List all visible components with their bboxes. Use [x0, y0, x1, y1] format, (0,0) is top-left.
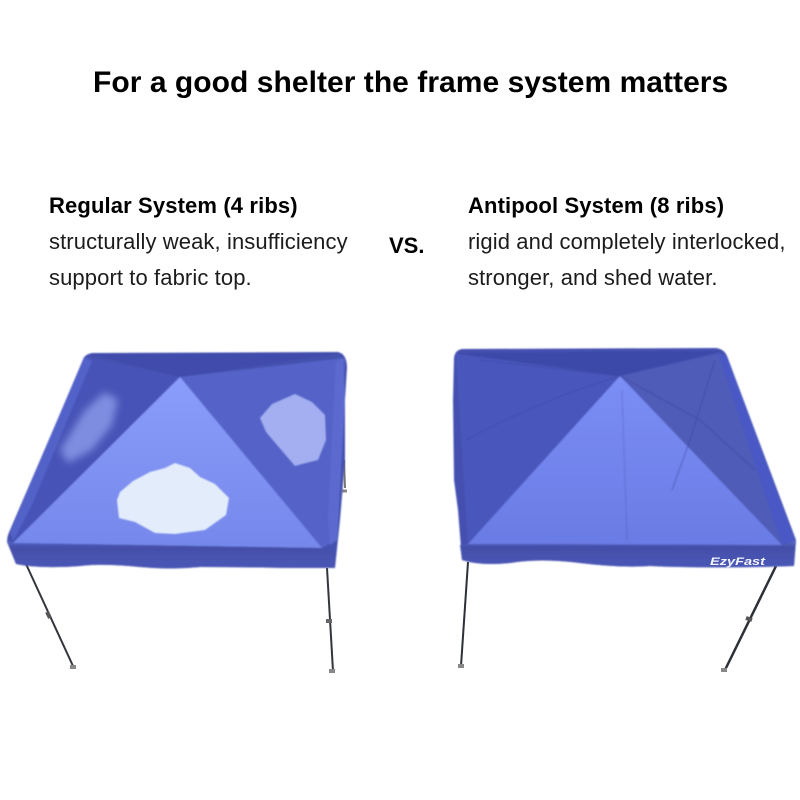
brand label: EzyFast [710, 556, 767, 568]
description: antipool system: stronger, and shed water. [468, 265, 718, 290]
front panel [13, 377, 322, 548]
description: antipool system: rigid and completely interlocked, [468, 229, 786, 254]
back panel [456, 351, 722, 376]
front band [7, 540, 335, 568]
right panel [620, 353, 782, 545]
front band [460, 540, 796, 567]
left panel [456, 354, 620, 544]
tent legs [26, 460, 347, 671]
left panel [13, 356, 180, 543]
heading: antipool system: Antipool System (8 ribs) [468, 193, 724, 218]
canopy [7, 352, 347, 568]
title: For a good shelter the frame system matters [93, 66, 728, 99]
tent: antipool system [453, 348, 796, 670]
description: regular system: support to fabric top. [49, 265, 252, 290]
right panel [180, 358, 345, 548]
description: regular system: structurally weak, insufficiency [49, 229, 348, 254]
ribs [466, 360, 755, 540]
left edge strip [10, 357, 92, 541]
vs label: VS. [389, 233, 424, 258]
text block: antipool system [468, 193, 786, 290]
back panel [88, 353, 342, 377]
right water pool [260, 394, 326, 466]
right edge strip [328, 358, 345, 545]
tent legs [458, 562, 776, 670]
canopy [453, 348, 796, 567]
left water pool [60, 392, 118, 463]
front water pool [117, 463, 229, 534]
front panel [468, 376, 782, 545]
description: antipool system [468, 229, 786, 290]
description: regular system [49, 229, 348, 290]
right edge strip [718, 353, 795, 545]
text block: regular system [49, 193, 348, 290]
heading: regular system: Regular System (4 ribs) [49, 193, 298, 218]
tent: regular system [7, 352, 347, 671]
